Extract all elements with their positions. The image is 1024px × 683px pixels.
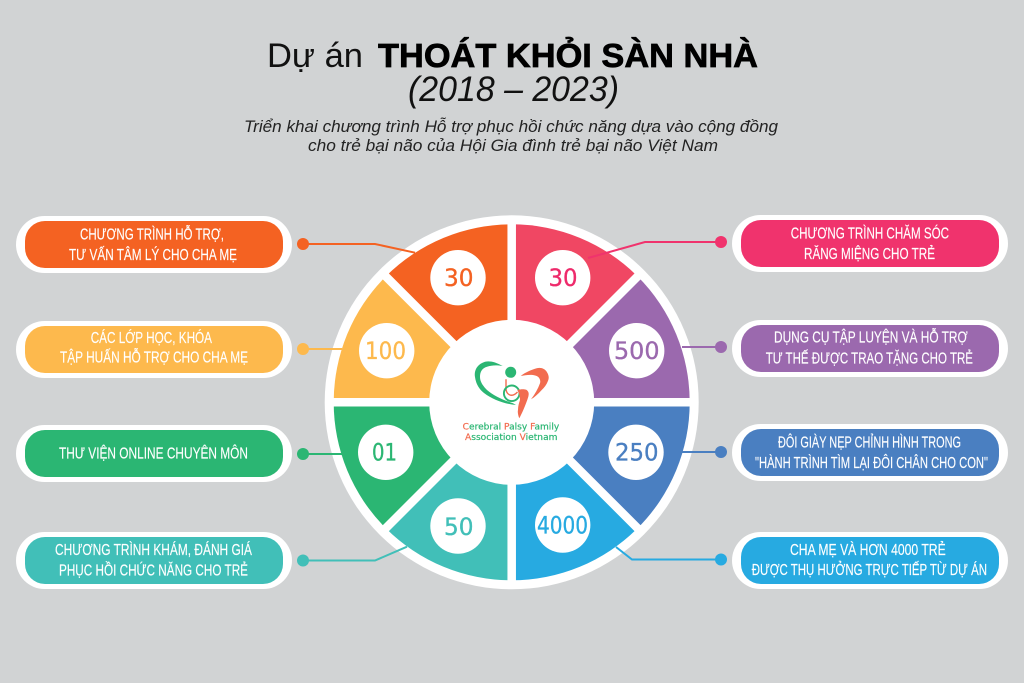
connector: green: [297, 448, 342, 460]
pill: orthopedic shoes: [732, 424, 1008, 481]
pill: online library: [16, 425, 292, 482]
number badge: 4000: 4000: [537, 512, 588, 540]
pill: parent training classes: CÁC LỚP HỌC, KHÓA: [91, 328, 212, 347]
pill: training equipment: [732, 320, 1008, 377]
pill: oral care programme: [732, 215, 1008, 272]
number badge: 30 red: 30: [548, 264, 578, 292]
heading: project name: Dự án: [267, 37, 363, 75]
number badge: 250: 250: [615, 439, 658, 467]
heading: years: (2018 – 2023): [408, 70, 619, 109]
number badge: 50: [430, 498, 486, 554]
pill: online library: THƯ VIỆN ONLINE CHUYÊN MÔN: [59, 443, 248, 462]
title block: [244, 37, 779, 155]
pill: counselling programme: TƯ VẤN TÂM LÝ CHO CHA MẸ: [69, 245, 237, 264]
pill: counselling programme: CHƯƠNG TRÌNH HỖ TRỢ,: [80, 224, 224, 243]
connector: teal: [297, 547, 407, 566]
number badge: 250: [608, 425, 664, 480]
number badge: 30 orange: 30: [444, 264, 474, 292]
logo mark: [475, 361, 549, 418]
number badge: 100: [359, 323, 414, 378]
wedge: red: [512, 224, 638, 402]
wedge: purple: [512, 276, 690, 402]
number badge: 01: [358, 425, 413, 480]
logo: Cerebral Palsy Family Association Vietnam: [463, 361, 559, 443]
subtitle line 1: Triển khai chương trình Hỗ trợ phục hồi chức năng dựa vào cộng đồng: [244, 117, 779, 136]
number badge: 30 red: [535, 250, 590, 305]
wedge: yellow: [334, 276, 512, 402]
pill: assessment programme: [16, 532, 292, 589]
pill: direct beneficiaries: [732, 532, 1008, 589]
connector: cyan: [616, 547, 727, 566]
wheel centre circle: [429, 320, 594, 485]
pill: counselling programme: [16, 216, 292, 273]
connector: pink: [588, 236, 727, 258]
connector: yellow: [297, 343, 342, 355]
wedge: cyan: [512, 402, 638, 580]
number badge: 01: 01: [372, 439, 397, 467]
wedge: green: [334, 402, 512, 528]
wheel white base: [325, 215, 699, 589]
wedge: blue: [512, 402, 690, 528]
number badge: 100: 100: [365, 337, 406, 365]
logo text line 1: Cerebral Palsy Family: [463, 422, 559, 432]
pill: direct beneficiaries: CHA MẸ VÀ HƠN 4000 TRẺ: [790, 540, 946, 559]
heading: bold project name: THOÁT KHỎI SÀN NHÀ: [378, 37, 758, 75]
pill: assessment programme: PHỤC HỒI CHỨC NĂNG CHO TRẺ: [59, 561, 248, 580]
logo text line 2: Association Vietnam: [465, 433, 557, 443]
number badge: 500: 500: [614, 337, 660, 365]
number badge: 4000: [535, 497, 590, 553]
pill: parent training classes: [16, 321, 292, 378]
pill: assessment programme: CHƯƠNG TRÌNH KHÁM, ĐÁNH GIÁ: [55, 540, 252, 559]
connector: orange: [297, 238, 415, 253]
number badge: 30 orange: [430, 250, 486, 305]
pill: oral care programme: RĂNG MIỆNG CHO TRẺ: [804, 244, 935, 263]
subtitle line 2: cho trẻ bại não của Hội Gia đình trẻ bại não Việt Nam: [308, 136, 718, 155]
pill: oral care programme: CHƯƠNG TRÌNH CHĂM SÓC: [791, 224, 949, 243]
connector: purple: [682, 341, 727, 353]
number badge: 500: [609, 323, 664, 378]
connector: blue: [682, 446, 727, 458]
number badge: 50: 50: [444, 513, 474, 541]
wedge: orange: [386, 224, 512, 402]
central wheel: [325, 215, 699, 589]
wedge: teal: [386, 402, 512, 580]
pill: parent training classes: TẬP HUẤN HỖ TRỢ CHO CHA MẸ: [60, 348, 248, 367]
